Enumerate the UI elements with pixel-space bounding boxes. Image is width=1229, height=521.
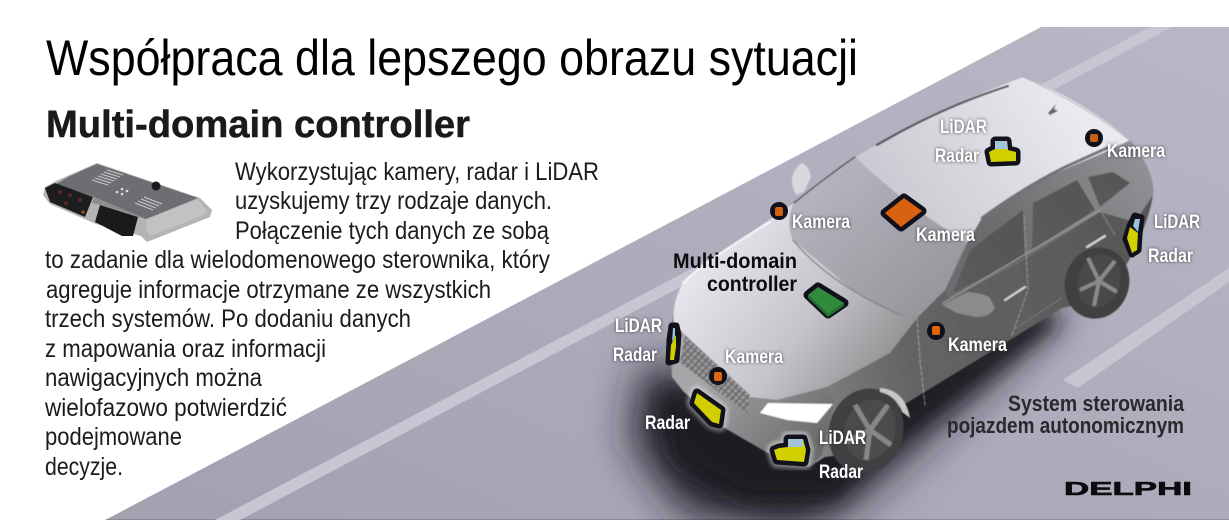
sensor: bumper lidar and radar bbox=[773, 438, 807, 463]
body text: Połączenie tych danych ze sobą bbox=[235, 217, 549, 245]
sensor: side camera bbox=[927, 322, 945, 340]
labels: white sensor names: Kamera bbox=[916, 225, 975, 246]
body text: trzech systemów. Po dodaniu danych bbox=[45, 305, 411, 333]
roof rails and body lines bbox=[683, 77, 1132, 405]
body text: podejmowane bbox=[45, 423, 182, 451]
labels: white sensor names: Radar bbox=[1148, 246, 1194, 267]
sensor: multi-domain controller bbox=[808, 287, 844, 317]
door handles bbox=[1005, 236, 1105, 300]
left mirror bbox=[792, 163, 811, 195]
side windows bbox=[953, 210, 1025, 293]
sensor: left lidar and radar bbox=[669, 326, 678, 362]
rear wheel bbox=[1055, 239, 1139, 327]
body text: uzyskujemy trzy rodzaje danych. bbox=[235, 187, 552, 215]
body text: decyzje. bbox=[45, 453, 123, 481]
labels: white sensor names: Radar bbox=[935, 146, 979, 167]
headlight bbox=[760, 403, 833, 423]
hood bbox=[673, 203, 917, 400]
labels: white sensor names: Radar bbox=[645, 413, 691, 434]
label: multi-domain controller: Multi-domain bbox=[673, 250, 797, 273]
labels: white sensor names: Kamera bbox=[948, 335, 1007, 356]
labels: white sensor names: Kamera bbox=[792, 212, 850, 233]
labels: white sensor names: LiDAR bbox=[615, 316, 662, 337]
labels: white sensor names bbox=[613, 117, 1200, 483]
labels: white sensor names: Radar bbox=[819, 462, 863, 483]
body text: to zadanie dla wielodomenowego sterownika, który bbox=[45, 246, 550, 274]
labels: white sensor names: Kamera bbox=[725, 347, 783, 368]
labels: white sensor names: Kamera bbox=[1107, 141, 1165, 162]
caption: autonomous driving system: pojazdem autonomicznym bbox=[947, 413, 1184, 438]
icon: controller unit bbox=[43, 163, 212, 242]
sensor: roof lidar and radar bbox=[989, 141, 1016, 162]
body text: agreguje informacje otrzymane ze wszystkich bbox=[46, 276, 491, 304]
body text: wielofazowo potwierdzić bbox=[44, 394, 287, 422]
caption: autonomous driving system: System sterowania bbox=[1008, 391, 1185, 416]
caption: autonomous driving system bbox=[947, 391, 1185, 438]
roof bbox=[855, 77, 1130, 243]
car body bbox=[670, 77, 1153, 467]
body text: nawigacyjnych można bbox=[45, 364, 262, 392]
car illustration bbox=[670, 77, 1153, 483]
title: Współpraca dla lepszego obrazu sytuacji bbox=[46, 30, 858, 86]
body text bbox=[44, 158, 599, 481]
sensor: right lidar and radar bbox=[1126, 216, 1141, 254]
labels: white sensor names: LiDAR bbox=[1154, 212, 1200, 233]
body text: Wykorzystując kamery, radar i LiDAR bbox=[235, 158, 599, 186]
sensor: mirror camera bbox=[770, 202, 788, 220]
roof antenna bbox=[1048, 104, 1058, 115]
sensor: front camera bbox=[709, 367, 727, 385]
sensor: windscreen camera bbox=[885, 198, 922, 227]
subtitle: Multi-domain controller bbox=[46, 104, 470, 146]
front wheel bbox=[818, 379, 914, 483]
right mirror bbox=[942, 292, 995, 317]
body text: z mapowania oraz informacji bbox=[45, 335, 326, 363]
label: multi-domain controller bbox=[673, 250, 797, 296]
upper side panel bbox=[945, 140, 1153, 300]
front bumper bbox=[672, 322, 835, 467]
logo: Delphi: DELPHI bbox=[1064, 479, 1192, 499]
labels: white sensor names: LiDAR bbox=[819, 428, 866, 449]
labels: white sensor names: LiDAR bbox=[940, 117, 987, 138]
label: multi-domain controller: controller bbox=[707, 273, 797, 296]
windscreen bbox=[789, 157, 967, 318]
labels: white sensor names: Radar bbox=[613, 345, 657, 366]
sensor: front radar bbox=[693, 392, 722, 425]
grille bbox=[680, 335, 750, 413]
sensor: rear camera bbox=[1085, 129, 1103, 147]
